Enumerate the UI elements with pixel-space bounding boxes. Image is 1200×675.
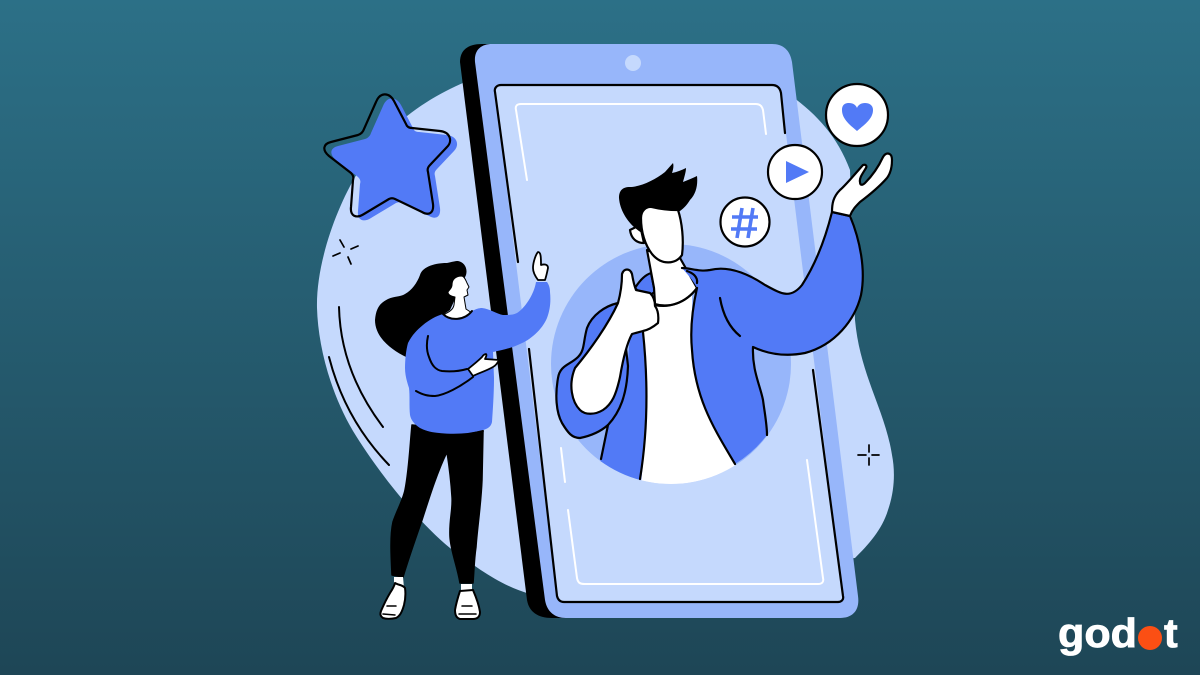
screen highlights — [516, 104, 823, 584]
icon: hashtag — [720, 198, 770, 246]
star outline — [324, 94, 450, 216]
hair — [619, 163, 697, 233]
woman lower hand — [468, 354, 499, 376]
phone — [460, 44, 858, 618]
left shoe — [380, 583, 405, 619]
motion lines — [329, 307, 389, 465]
woman neck and face — [443, 276, 472, 319]
right shoe — [455, 590, 480, 619]
sweater lines — [413, 336, 483, 435]
woman raised hand — [533, 252, 548, 280]
logo dot — [1138, 626, 1162, 650]
sparkle left — [333, 240, 358, 264]
woman hair — [375, 261, 467, 357]
left sleeve — [556, 303, 628, 438]
left sock — [394, 577, 404, 588]
left collar — [635, 273, 655, 298]
leggings — [391, 425, 483, 583]
camera — [625, 55, 641, 71]
face — [641, 207, 683, 262]
shoe details — [383, 606, 476, 615]
logo — [1058, 610, 1178, 656]
thumbs up arm — [571, 270, 658, 414]
right hand — [832, 154, 892, 216]
icon: heart — [826, 84, 888, 146]
right sock — [461, 584, 472, 592]
neckline — [655, 288, 697, 306]
logo letter t: t — [1164, 610, 1178, 656]
left jacket panel — [600, 332, 646, 480]
phone back — [460, 44, 565, 618]
neck — [647, 250, 697, 305]
ear — [630, 225, 644, 243]
woman — [375, 252, 550, 619]
jacket panel lines — [601, 332, 646, 479]
collar line — [443, 311, 472, 319]
screen outline — [495, 85, 843, 602]
logo wordmark: god — [1058, 610, 1137, 656]
shirt — [641, 296, 736, 484]
icon: play — [768, 145, 822, 199]
sparkle right — [858, 445, 879, 465]
phone screen — [495, 85, 843, 602]
phone body — [475, 44, 858, 618]
portrait circle — [551, 244, 791, 484]
star — [324, 94, 457, 220]
man — [551, 154, 892, 490]
sweater — [405, 282, 550, 435]
collar right — [687, 271, 697, 283]
jacket outline — [682, 212, 863, 464]
background blob — [317, 80, 894, 594]
jacket and raised arm fill — [682, 212, 863, 464]
star fill — [331, 98, 457, 220]
jacket fold — [720, 298, 740, 336]
